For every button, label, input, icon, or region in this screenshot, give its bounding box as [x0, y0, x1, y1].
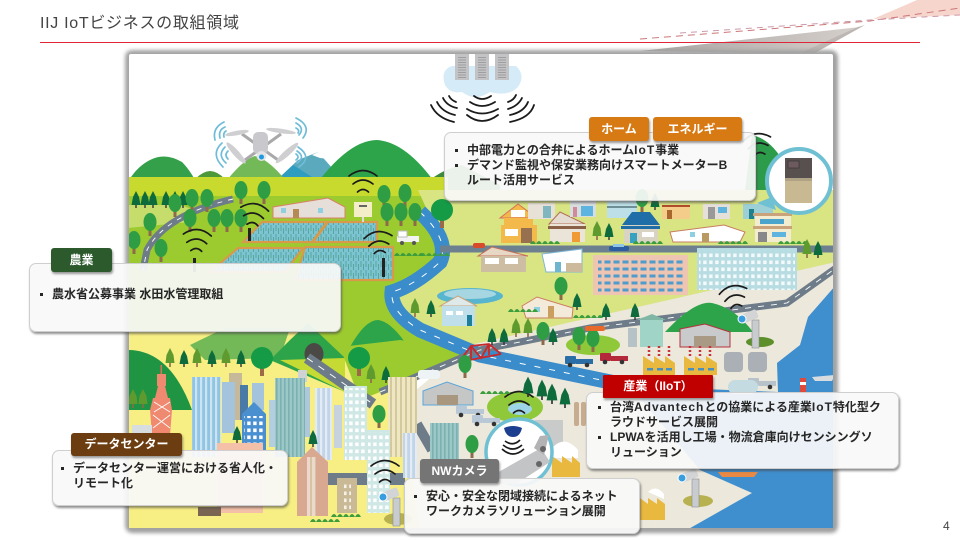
- residential houses row: [473, 189, 808, 251]
- pale residential ground: [400, 190, 833, 344]
- bullet: smart meter: [467, 158, 727, 188]
- bullet: chubu electric: 中部電力との合弁によるホームIoT事業: [467, 143, 679, 157]
- tag: network camera: [420, 459, 499, 483]
- tokyo tower: [132, 365, 172, 439]
- bullet: advantech: ラウドサービス展開: [610, 415, 718, 429]
- bullet: closed network camera: ワークカメラソリューション展開: [426, 504, 606, 518]
- bullet: smart meter: ルート活用サービス: [467, 173, 575, 187]
- card: agriculture: [29, 263, 341, 332]
- card: network camera: [404, 478, 640, 534]
- wifi signals and sensors: farm: [182, 170, 394, 277]
- park with pond and wifi: [480, 377, 586, 426]
- lower residential houses and apartments: [410, 239, 822, 326]
- farm trees: [128, 181, 453, 262]
- bullet: closed network camera: [426, 489, 618, 519]
- tag: data center: データセンター: [84, 437, 168, 451]
- bullet: data center operation: データセンター運営における省人化・: [73, 461, 277, 475]
- tag: energy: エネルギー: [667, 122, 728, 136]
- decorative header swoosh and red rule: [40, 0, 960, 52]
- card: data center: [52, 450, 288, 506]
- icon: drone: [214, 118, 306, 167]
- warehouse, trucks and trees near the river: [418, 370, 563, 461]
- tag: agriculture: [51, 248, 112, 272]
- icon: cloud with servers: [431, 53, 534, 122]
- page number: 4: [943, 519, 950, 533]
- farmland ground: [128, 177, 448, 366]
- bullet: data center operation: [73, 461, 277, 491]
- bullet: paddy water management: 農水省公募事業 水田水管理取組: [52, 287, 223, 301]
- bullet: advantech: [610, 400, 881, 430]
- river: [392, 212, 620, 384]
- tag: home: [589, 117, 649, 141]
- city ground and hills: [128, 320, 480, 531]
- city skyline: [192, 370, 417, 526]
- bullet: data center operation: リモート化: [73, 476, 133, 490]
- bullet: advantech: 台湾Advantechとの協業による産業IoT特化型ク: [610, 400, 881, 414]
- city trees: [128, 347, 472, 428]
- tag: home: ホーム: [601, 122, 637, 136]
- tag: industry: [603, 375, 713, 398]
- tag: agriculture: 農業: [69, 253, 94, 267]
- bullet: closed network camera: 安心・安全な閉域接続によるネット: [426, 489, 618, 503]
- industrial zone: factories, warehouses, tanks: [459, 131, 835, 520]
- beige industrial ground: [380, 262, 836, 531]
- callout: network camera magnifier: [486, 419, 580, 485]
- title: IIJ IoTビジネスの取組領域: [40, 15, 240, 32]
- farmhouse and sign: [273, 198, 450, 256]
- tag: energy: [653, 117, 742, 141]
- hills and mountains: [131, 136, 778, 190]
- illustration: smart city map: [129, 54, 833, 528]
- bullet: lpwa: [610, 430, 873, 460]
- tag: industry: 産業（IIoT）: [623, 379, 693, 393]
- tag: data center: [71, 433, 182, 456]
- bullet: lpwa: LPWAを活用し工場・物流倉庫向けセンシングソ: [610, 430, 873, 444]
- bullet: smart meter: デマンド監視や保安業務向けスマートメーターB: [467, 158, 727, 172]
- tag: network camera: NWカメラ: [432, 464, 488, 478]
- card: home and energy: [444, 132, 756, 201]
- callout: smart meter magnifier: [757, 149, 831, 213]
- rice paddies: [210, 222, 393, 280]
- card: industry: [586, 392, 899, 469]
- sea: [630, 285, 836, 531]
- roads: [143, 199, 836, 479]
- panel: illustrated map frame: [129, 54, 833, 528]
- bullet: lpwa: リューション: [610, 445, 682, 459]
